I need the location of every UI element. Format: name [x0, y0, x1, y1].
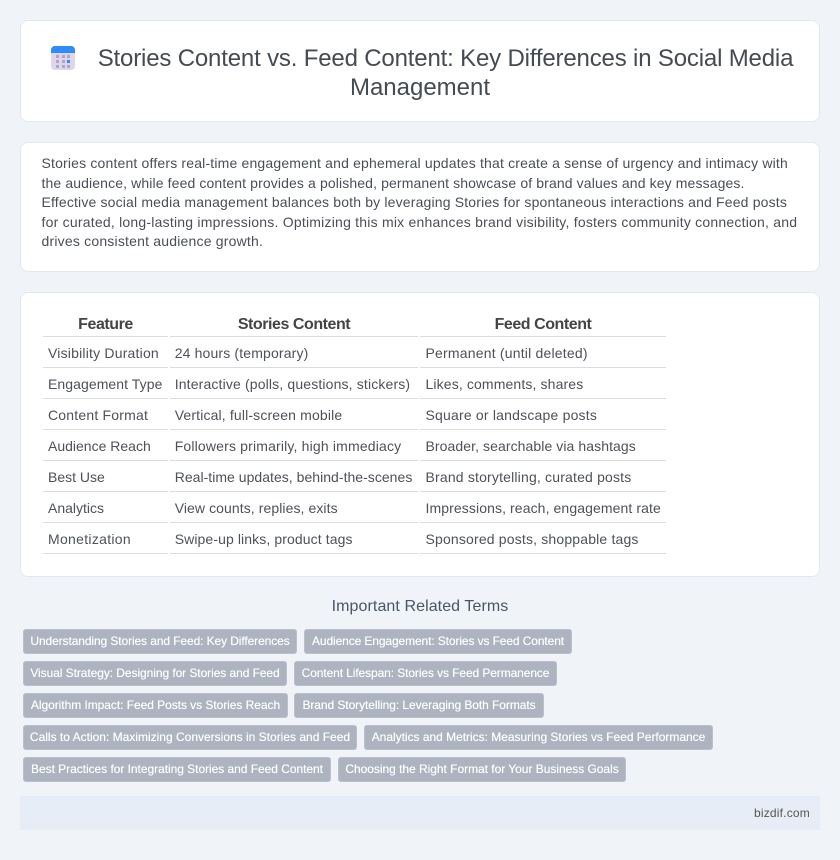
tag: Best Practices for Integrating Stories and Feed Content [31, 762, 323, 776]
text: summary paragraph: Stories content offers real-time engagement and ephemeral updates that create a sense of urgency and intimacy with [42, 155, 788, 171]
table: stories vs feed comparison [43, 316, 666, 554]
row: content format: Content Format [48, 407, 148, 423]
tag: Choosing the Right Format for Your Business Goals [345, 762, 619, 776]
row: best use: Best Use [48, 469, 105, 485]
tag: Brand Storytelling: Leveraging Both Formats [302, 698, 536, 712]
panel: comparison table [20, 292, 820, 577]
tag: Content Lifespan: Stories vs Feed Permanence [302, 666, 549, 680]
tag [338, 757, 626, 782]
table header: Stories Content [238, 316, 350, 333]
text: summary paragraph [42, 155, 797, 249]
title line 2: Management [350, 74, 490, 101]
tag: Calls to Action: Maximizing Conversions in Stories and Feed [30, 730, 350, 744]
row: visibility duration: Visibility Duration [48, 345, 159, 361]
row: analytics [48, 500, 661, 516]
text: summary paragraph: the audience, while feed content provides a polished, permanent showcase of brand values and key messages. [42, 175, 745, 191]
table header [78, 316, 592, 333]
row: engagement type: Interactive (polls, questions, stickers) [175, 376, 410, 392]
text: summary paragraph: Effective social media management balances both by leveraging Stories for spontaneous interactions and Feed posts [42, 194, 787, 210]
row: best use [48, 469, 631, 485]
icon: calendar [51, 46, 75, 70]
tag list [23, 629, 713, 782]
panel: header [20, 20, 820, 122]
row: monetization: Swipe-up links, product tags [175, 531, 353, 547]
row: best use: Real-time updates, behind-the-scenes [175, 469, 412, 485]
row: engagement type: Likes, comments, shares [426, 376, 583, 392]
tag [23, 629, 297, 654]
title: Stories Content vs. Feed Content: Key Differences in Social Media [98, 45, 793, 72]
tag [23, 661, 287, 686]
tag: Audience Engagement: Stories vs Feed Content [312, 634, 564, 648]
tag [23, 757, 331, 782]
row: analytics: Impressions, reach, engagement rate [426, 500, 661, 516]
tag: Analytics and Metrics: Measuring Stories vs Feed Performance [372, 730, 705, 744]
row: visibility duration: 24 hours (temporary) [175, 345, 308, 361]
row: content format [48, 407, 597, 423]
row: monetization: Sponsored posts, shoppable tags [426, 531, 639, 547]
text: summary paragraph: for curated, long-lasting impressions. Optimizing this mix enhances brand visibility, fosters community connection, and [42, 214, 797, 230]
tag [23, 725, 357, 750]
footer bar [20, 796, 820, 830]
row: analytics: View counts, replies, exits [175, 500, 338, 516]
tag: Algorithm Impact: Feed Posts vs Stories Reach [31, 698, 280, 712]
tag [364, 725, 713, 750]
row: monetization [48, 531, 639, 547]
row: analytics: Analytics [48, 500, 104, 516]
row: audience reach: Broader, searchable via hashtags [426, 438, 636, 454]
row: best use: Brand storytelling, curated posts [426, 469, 631, 485]
row: audience reach: Followers primarily, high immediacy [175, 438, 401, 454]
heading: important related terms: Important Related Terms [332, 598, 508, 615]
footer text: bizdif.com [754, 806, 810, 820]
tag [294, 693, 544, 718]
text: summary paragraph: drives consistent audience growth. [42, 233, 263, 249]
row: visibility duration: Permanent (until deleted) [426, 345, 588, 361]
row: content format: Square or landscape posts [426, 407, 597, 423]
tag: Visual Strategy: Designing for Stories and Feed [30, 666, 280, 680]
tag [23, 693, 288, 718]
row: audience reach [48, 438, 636, 454]
row: engagement type [48, 376, 583, 392]
row: monetization: Monetization [48, 531, 131, 547]
panel: summary [20, 142, 820, 272]
row: content format: Vertical, full-screen mobile [175, 407, 342, 423]
row: visibility duration [48, 345, 588, 361]
tag [294, 661, 557, 686]
tag [304, 629, 572, 654]
table header: Feature [78, 316, 133, 333]
row: engagement type: Engagement Type [48, 376, 162, 392]
row: audience reach: Audience Reach [48, 438, 151, 454]
tag: Understanding Stories and Feed: Key Differences [30, 634, 290, 648]
table header: Feed Content [495, 316, 591, 333]
